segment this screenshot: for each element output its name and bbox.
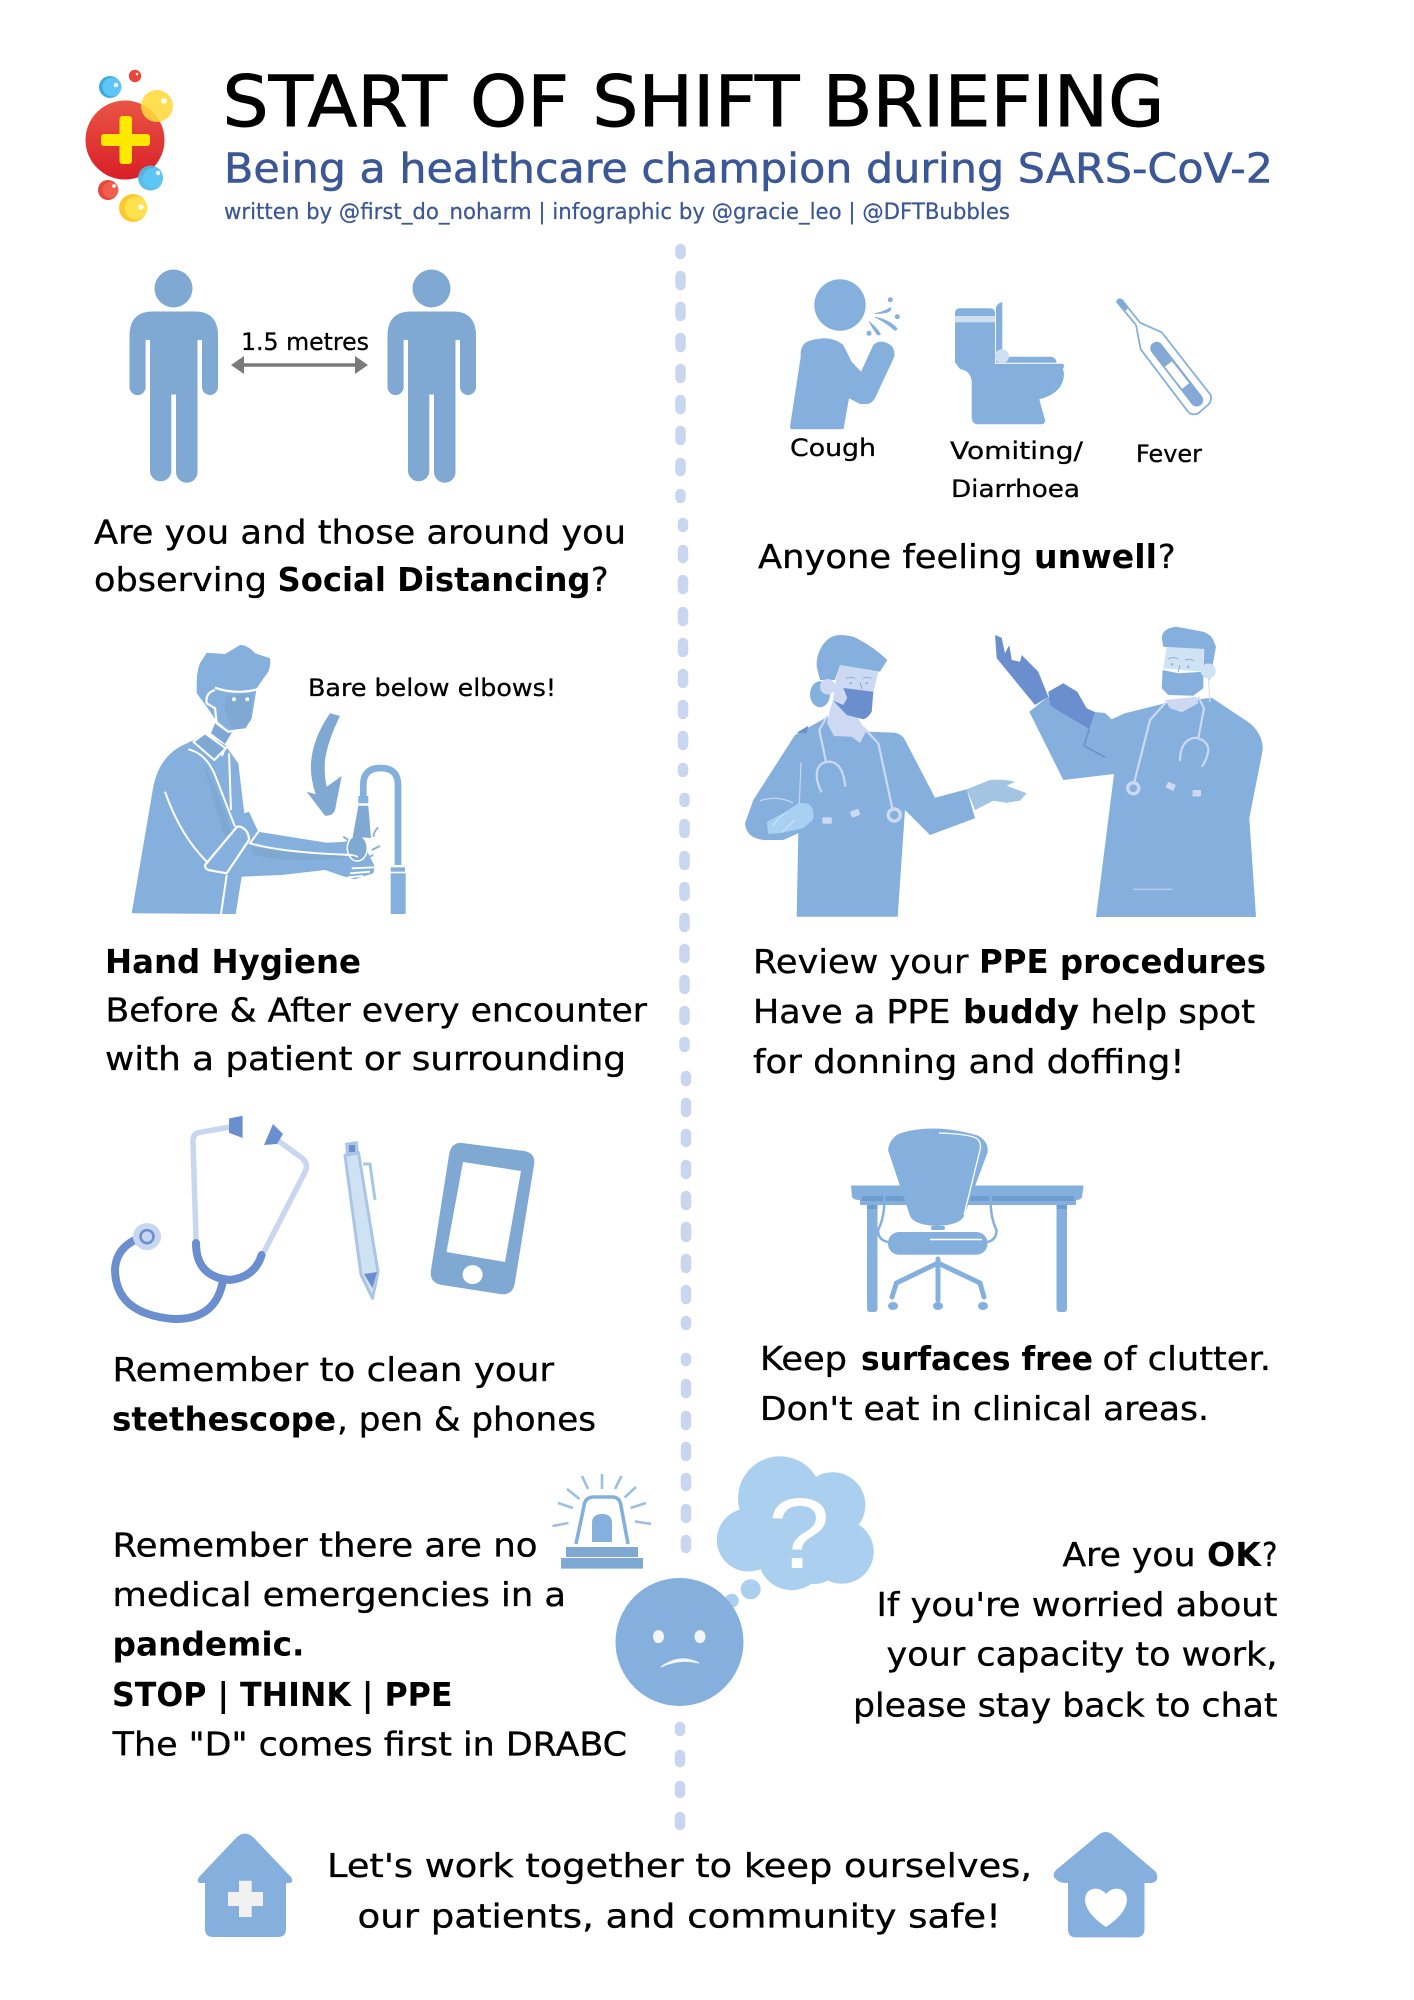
- panel: are you OK: [616, 1456, 1288, 1724]
- text: are you OK: If you're worried about: [876, 1585, 1278, 1624]
- text: social distancing question: Social Distancing: [278, 560, 590, 599]
- text: unwell question: ?: [1158, 537, 1176, 576]
- icon: bubbles logo: [86, 70, 173, 222]
- icon: thought cloud: [717, 1456, 874, 1608]
- text: no medical emergencies: The "D" comes first in DRABC: [112, 1724, 627, 1764]
- text: are you OK: ?: [1262, 1535, 1278, 1574]
- labels: symptoms: [790, 434, 1202, 503]
- icon: person left: [130, 270, 218, 483]
- credits: written by @first_do_noharm | infographic by @gracie_leo | @DFTBubbles: [224, 200, 1010, 225]
- text: unwell question: unwell: [1034, 537, 1157, 576]
- icon: house with cross: [198, 1834, 292, 1937]
- labels: symptoms: Vomiting/: [950, 437, 1084, 465]
- icon: desk and chair: [851, 1129, 1084, 1312]
- text: are you OK: your capacity to work,: [886, 1634, 1278, 1674]
- text: are you OK: please stay back to chat: [853, 1686, 1278, 1724]
- arrow: down to tap: [307, 713, 342, 816]
- text: closing message: Let's work together to keep ourselves,: [327, 1846, 1032, 1885]
- icon: alarm siren: [552, 1474, 651, 1569]
- panel: hand hygiene: [105, 645, 658, 1078]
- text: hand hygiene: with a patient or surrounding: [105, 1039, 626, 1078]
- text: social distancing question: Are you and those around you: [94, 512, 626, 552]
- text: PPE procedures: Have a PPE: [753, 992, 950, 1031]
- panel: clean equipment: [112, 1116, 596, 1438]
- panel: PPE procedures: [745, 627, 1276, 1081]
- icon: cough: [790, 279, 900, 429]
- text: surfaces free: Don't eat in clinical areas.: [760, 1389, 1209, 1428]
- icon: doctor right: [995, 627, 1263, 917]
- text: PPE procedures: for donning and doffing!: [753, 1042, 1184, 1081]
- text: surfaces free: of clutter.: [1102, 1339, 1271, 1378]
- icon: sad face: [616, 1578, 744, 1706]
- text: social distancing question: ?: [591, 560, 609, 599]
- text: clean your stethoscope: Remember to clean your: [112, 1350, 554, 1389]
- text: PPE procedures: PPE procedures: [979, 942, 1266, 981]
- text: clean your stethoscope: , pen & phones: [337, 1400, 596, 1438]
- panel: social distancing: [94, 270, 636, 599]
- icon: toilet: [955, 302, 1064, 424]
- icon: thermometer: [1117, 299, 1211, 414]
- text: no medical emergencies: STOP | THINK | PPE: [112, 1675, 452, 1714]
- arrow: distance: [231, 356, 368, 374]
- text: closing message: our patients, and community safe!: [358, 1896, 1001, 1936]
- icon: person right: [388, 270, 476, 483]
- text: hand hygiene: Hand Hygiene: [105, 942, 361, 981]
- text: no medical emergencies: pandemic.: [112, 1624, 304, 1664]
- panel: clutter: [760, 1129, 1282, 1428]
- icon: doctor left: [745, 635, 1027, 917]
- icon: house with heart: [1054, 1832, 1157, 1937]
- icon: stethoscope: [115, 1116, 306, 1319]
- text: no medical emergencies: Remember there are no: [112, 1526, 538, 1564]
- callout: bare below elbows: Bare below elbows!: [308, 674, 556, 702]
- title: START OF SHIFT BRIEFING: [222, 61, 1164, 143]
- icon: person washing hands: [132, 645, 375, 914]
- labels: symptoms: Diarrhoea: [951, 475, 1080, 503]
- header: [86, 61, 1273, 225]
- text: are you OK: Are you: [1062, 1535, 1196, 1574]
- icon: phone: [431, 1143, 534, 1294]
- labels: symptoms: Cough: [790, 434, 876, 462]
- text: are you OK: OK: [1207, 1535, 1262, 1574]
- text: surfaces free: Keep: [760, 1339, 847, 1378]
- distance label: 1.5 metres: [241, 328, 369, 356]
- panel: no medical emergencies: [112, 1474, 651, 1764]
- panel: feeling unwell: [758, 279, 1211, 576]
- text: PPE procedures: help spot: [1090, 992, 1255, 1031]
- text: PPE procedures: Review your: [753, 942, 969, 981]
- text: unwell question: Anyone feeling: [758, 537, 1023, 576]
- text: social distancing question: observing: [94, 560, 267, 599]
- text: surfaces free: surfaces free: [861, 1339, 1093, 1378]
- icon: pen: [345, 1141, 378, 1298]
- subtitle: Being a healthcare champion during SARS-CoV-2: [224, 144, 1273, 192]
- icon: question mark: ?: [768, 1478, 830, 1590]
- text: no medical emergencies: medical emergencies in a: [112, 1575, 566, 1614]
- text: hand hygiene: Before & After every encounter: [106, 990, 647, 1030]
- center dotted divider: [680, 249, 686, 1825]
- icon: tap: [343, 768, 406, 914]
- labels: symptoms: Fever: [1136, 440, 1202, 468]
- text: PPE procedures: buddy: [963, 992, 1079, 1031]
- footer: [198, 1832, 1157, 1937]
- text: clean your stethoscope: stethescope: [112, 1400, 336, 1438]
